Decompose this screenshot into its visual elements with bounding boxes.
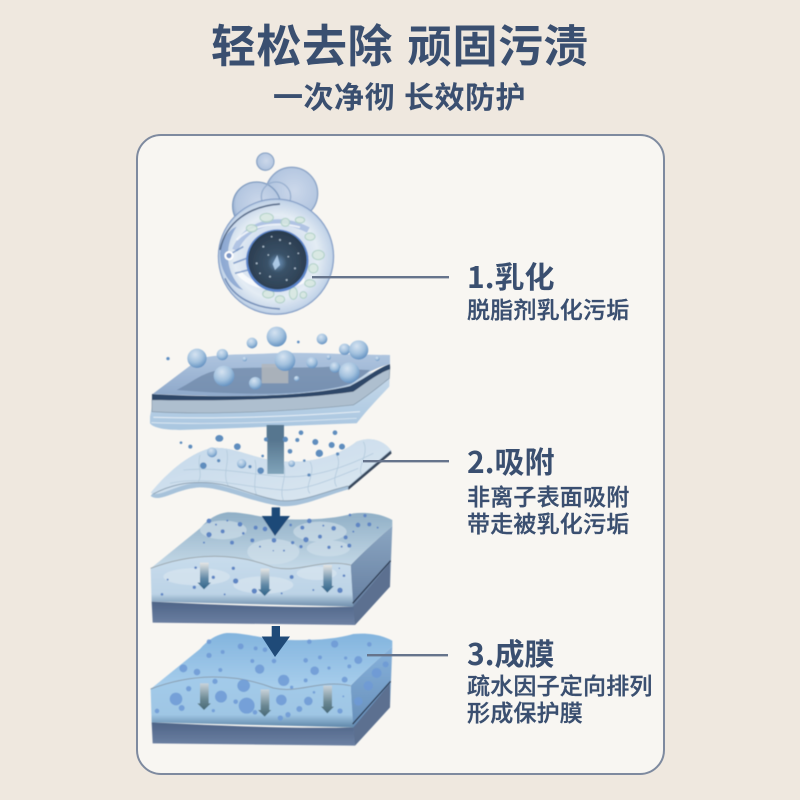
small down arrows (197, 683, 334, 717)
surface layer body (150, 353, 390, 430)
illustration: protective film layer (151, 633, 392, 746)
dark base (152, 602, 355, 625)
subtitle first phrase: 一次净彻 (273, 82, 395, 115)
title: 轻松去除 (211, 21, 393, 72)
leader line: emulsify (312, 276, 449, 278)
connector stem (267, 425, 284, 442)
step 3 description line 2: 形成保护膜 (467, 694, 583, 728)
step 3 heading: 3.成膜 (467, 630, 554, 674)
large arrow (262, 507, 290, 536)
front face (151, 556, 353, 607)
falling stem (267, 440, 284, 474)
dirt particles (180, 430, 345, 477)
top face (151, 633, 392, 689)
floating bubbles above surface (187, 327, 380, 390)
panel: process card (137, 135, 664, 774)
top face pale patches (200, 521, 350, 564)
step 1 heading: 1.乳化 (467, 253, 554, 297)
membrane sheet (151, 439, 392, 506)
right side face (351, 526, 392, 625)
step 1 description: 脱脂剂乳化污垢 (467, 291, 629, 325)
step 3 description line 1: 疏水因子定向排列 (467, 667, 653, 701)
large arrow into film layer (262, 626, 290, 657)
front face (151, 677, 353, 727)
title second phrase: 顽固污渍 (407, 21, 589, 72)
illustration: emulsifying sphere (218, 153, 334, 314)
illustration: adsorption membrane (151, 425, 392, 506)
small dots above surface (166, 341, 300, 360)
step 2 description line 1: 非离子表面吸附 (467, 478, 629, 512)
top face (151, 512, 392, 569)
right side face (351, 647, 392, 746)
leader line: adsorb (363, 460, 449, 462)
particles (161, 514, 379, 596)
leader line: film (367, 654, 448, 656)
step 2 description line 2: 带走被乳化污垢 (467, 505, 629, 539)
dark base (152, 722, 355, 746)
front pale patches (163, 567, 337, 594)
illustration: surface layer with bubbles (150, 327, 390, 430)
step 2 heading: 2.吸附 (467, 438, 554, 482)
illustration: skin layer with particles (151, 507, 392, 625)
subtitle second phrase: 长效防护 (404, 82, 526, 115)
film bubbles (155, 639, 389, 721)
small down arrows (197, 563, 334, 596)
